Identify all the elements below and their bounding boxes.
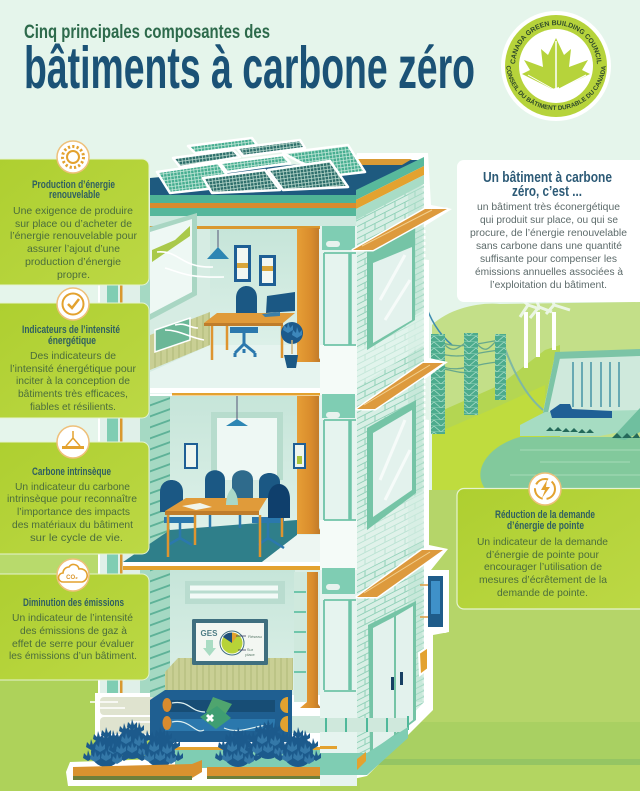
- body text: mesures d’écrêtement de la: [479, 574, 607, 586]
- left shrub: [83, 719, 183, 767]
- body text: assurer l’ajout d’une: [27, 243, 120, 255]
- heading: Indicateurs de l’intensité: [22, 324, 120, 336]
- monitor: [266, 292, 295, 313]
- wainscot: [150, 312, 210, 370]
- panel: indicateurs de l'intensité énergétique: [0, 303, 149, 418]
- body text: Des indicateurs de: [30, 350, 116, 362]
- building: left edge visible between panels: [98, 226, 150, 698]
- logo: Canada Green Building Council: [501, 11, 611, 121]
- hydro dam: [500, 335, 640, 440]
- panel: production d'énergie renouvelable: [0, 159, 149, 285]
- body text: Un indicateur de l’intensité: [12, 612, 133, 624]
- floor 2: meeting room: [123, 396, 322, 570]
- body text: émissions annuelles associées à: [475, 267, 623, 278]
- icon: CO2 cloud: CO₂: [66, 575, 78, 581]
- front chair: [268, 484, 290, 518]
- body text: procure, de l’énergie renouvelable: [470, 228, 627, 239]
- heading: Réduction de la demande: [495, 509, 595, 521]
- icon: sun: [57, 141, 89, 173]
- ventilation pipes: [90, 697, 160, 734]
- body text: propre.: [57, 269, 90, 281]
- body text: un bâtiment très éconergétique: [477, 202, 620, 213]
- body text: qui produit sur place, ou qui se: [480, 215, 618, 226]
- panel: réduction de la demande d'énergie de pointe: [457, 488, 640, 609]
- logo: Canada Green Building Council: CANADA GREEN BUILDING COUNCIL: [510, 20, 602, 64]
- body text: effet de serre pour évaluer: [12, 638, 134, 650]
- base strip behind shrubs: [174, 742, 320, 750]
- slab: [123, 562, 320, 566]
- awnings: [353, 209, 447, 597]
- building: side brick wall: [356, 182, 424, 775]
- HVAC unit: ✖: [205, 713, 215, 725]
- body text: [10, 205, 138, 281]
- heading: énergétique: [48, 335, 96, 347]
- small posters: [184, 443, 198, 469]
- large window: [211, 412, 283, 480]
- GES display: Réseau: [248, 634, 262, 639]
- chairs: [160, 470, 280, 512]
- body text: production d’énergie: [25, 256, 121, 268]
- body text: l’importance des impacts: [17, 506, 130, 518]
- floor slab: [150, 388, 320, 393]
- icon: CO2 cloud: [57, 559, 89, 591]
- heading: zéro, c’est ...: [512, 183, 582, 200]
- heading: Production d’énergie: [32, 179, 115, 191]
- body text: [477, 536, 608, 599]
- orange column: [295, 396, 322, 534]
- panel: diminution des émissions: [0, 574, 149, 680]
- body text: [7, 481, 137, 544]
- panel: carbone intrinsèque: [0, 442, 149, 554]
- white rim: pipes and planters: [66, 693, 325, 786]
- heading: Carbone intrinsèque: [32, 466, 111, 478]
- louvres: [150, 396, 170, 548]
- body text: Un indicateur de la demande: [477, 536, 608, 548]
- vent: [155, 318, 190, 352]
- table: [165, 498, 267, 511]
- solar panels: [157, 138, 365, 193]
- title: Cinq principales composantes des: [24, 22, 270, 43]
- desk: [204, 313, 295, 323]
- heading: [22, 324, 120, 347]
- airflow: [157, 252, 224, 340]
- heading: renouvelable: [49, 189, 100, 201]
- heading: [495, 509, 595, 532]
- orange column: [300, 572, 321, 708]
- GES display: place: [245, 652, 256, 657]
- right shrub: [215, 719, 321, 767]
- body text: demande de pointe.: [497, 587, 588, 599]
- body text: d’énergie de pointe pour: [486, 549, 599, 561]
- power pylons and wires: [424, 300, 506, 434]
- HVAC unit: [150, 690, 320, 743]
- body text: [10, 350, 136, 413]
- body text: intrinsèque pour reconnaître: [7, 493, 137, 505]
- body text: l’énergie renouvelable pour: [10, 230, 138, 242]
- body text: des émissions de gaz à: [20, 625, 127, 637]
- icon: check mark: [57, 288, 89, 320]
- wind turbines: [518, 296, 570, 368]
- GES display: Sur: [247, 647, 254, 652]
- body text: les émissions d’un bâtiment.: [9, 650, 137, 662]
- body text: suffisante pour compenser les: [480, 254, 617, 265]
- building front: glazing and wall blocks: [320, 218, 357, 786]
- plant: [281, 322, 303, 344]
- landscape: hills, water and ground: [0, 302, 640, 791]
- body text: Une exigence de produire: [13, 205, 133, 217]
- office chair: [236, 286, 257, 313]
- heading: [483, 169, 612, 200]
- body text: sur le cycle de vie.: [30, 532, 123, 544]
- body text: fiables et résilients.: [30, 401, 116, 413]
- maple leaf: [522, 38, 590, 89]
- heading: Un bâtiment à carbone: [483, 169, 612, 186]
- pendant lamp: [217, 230, 219, 248]
- body text: sur place ou d’acheter de: [15, 218, 132, 230]
- small orange sign: [419, 647, 428, 675]
- wainscot: [165, 658, 293, 690]
- body text: [470, 202, 627, 291]
- icon: crane beam: [57, 426, 89, 458]
- icon: lightning bolt: [529, 473, 561, 505]
- body text: des matériaux du bâtiment: [12, 519, 133, 531]
- body text: Un indicateur du carbone: [15, 481, 130, 493]
- body text: l’intensité énergétique pour: [10, 363, 136, 375]
- panel: un bâtiment à carbone zéro: [457, 160, 640, 302]
- wall blocks: [322, 226, 355, 250]
- floor 1: office: [150, 213, 322, 396]
- heading: [32, 179, 115, 201]
- planters: [73, 760, 320, 780]
- heading: Diminution des émissions: [23, 597, 124, 609]
- orange column: [295, 228, 322, 362]
- ceiling vent: [185, 581, 285, 604]
- body text: [9, 612, 137, 662]
- side window floor 2: [367, 400, 416, 530]
- fan: [206, 697, 232, 718]
- body text: inciter à la conception de: [16, 375, 130, 387]
- logo: Canada Green Building Council: CONSEIL DU BÂTIMENT DURABLE DU CANADA: [506, 66, 606, 110]
- body text: encourager l’utilisation de: [484, 561, 602, 573]
- title: [24, 22, 475, 101]
- body text: l’exploitation du bâtiment.: [490, 280, 607, 291]
- building white outline: [150, 153, 452, 786]
- base: pipe and slab: [292, 716, 408, 775]
- blue meter panel: [420, 571, 448, 633]
- GES display: GES: [201, 629, 218, 638]
- rug: [123, 520, 297, 562]
- floor 3: mechanical room: [150, 570, 321, 708]
- open window: [150, 213, 197, 320]
- side window floor 1: [367, 226, 415, 350]
- pipe with rings: [294, 572, 308, 702]
- body text: bâtiments très efficaces,: [18, 388, 128, 400]
- body text: sans carbone dans une quantité: [476, 241, 622, 252]
- window frames: [324, 253, 356, 691]
- GES display: [192, 619, 268, 665]
- posters: [234, 245, 251, 282]
- louvres: [150, 570, 170, 700]
- side doors floor 3: [368, 601, 416, 755]
- teal slab behind shrubs: [175, 742, 325, 768]
- lamp: [236, 396, 238, 420]
- heading: d’énergie de pointe: [507, 520, 584, 532]
- roof: [150, 157, 424, 226]
